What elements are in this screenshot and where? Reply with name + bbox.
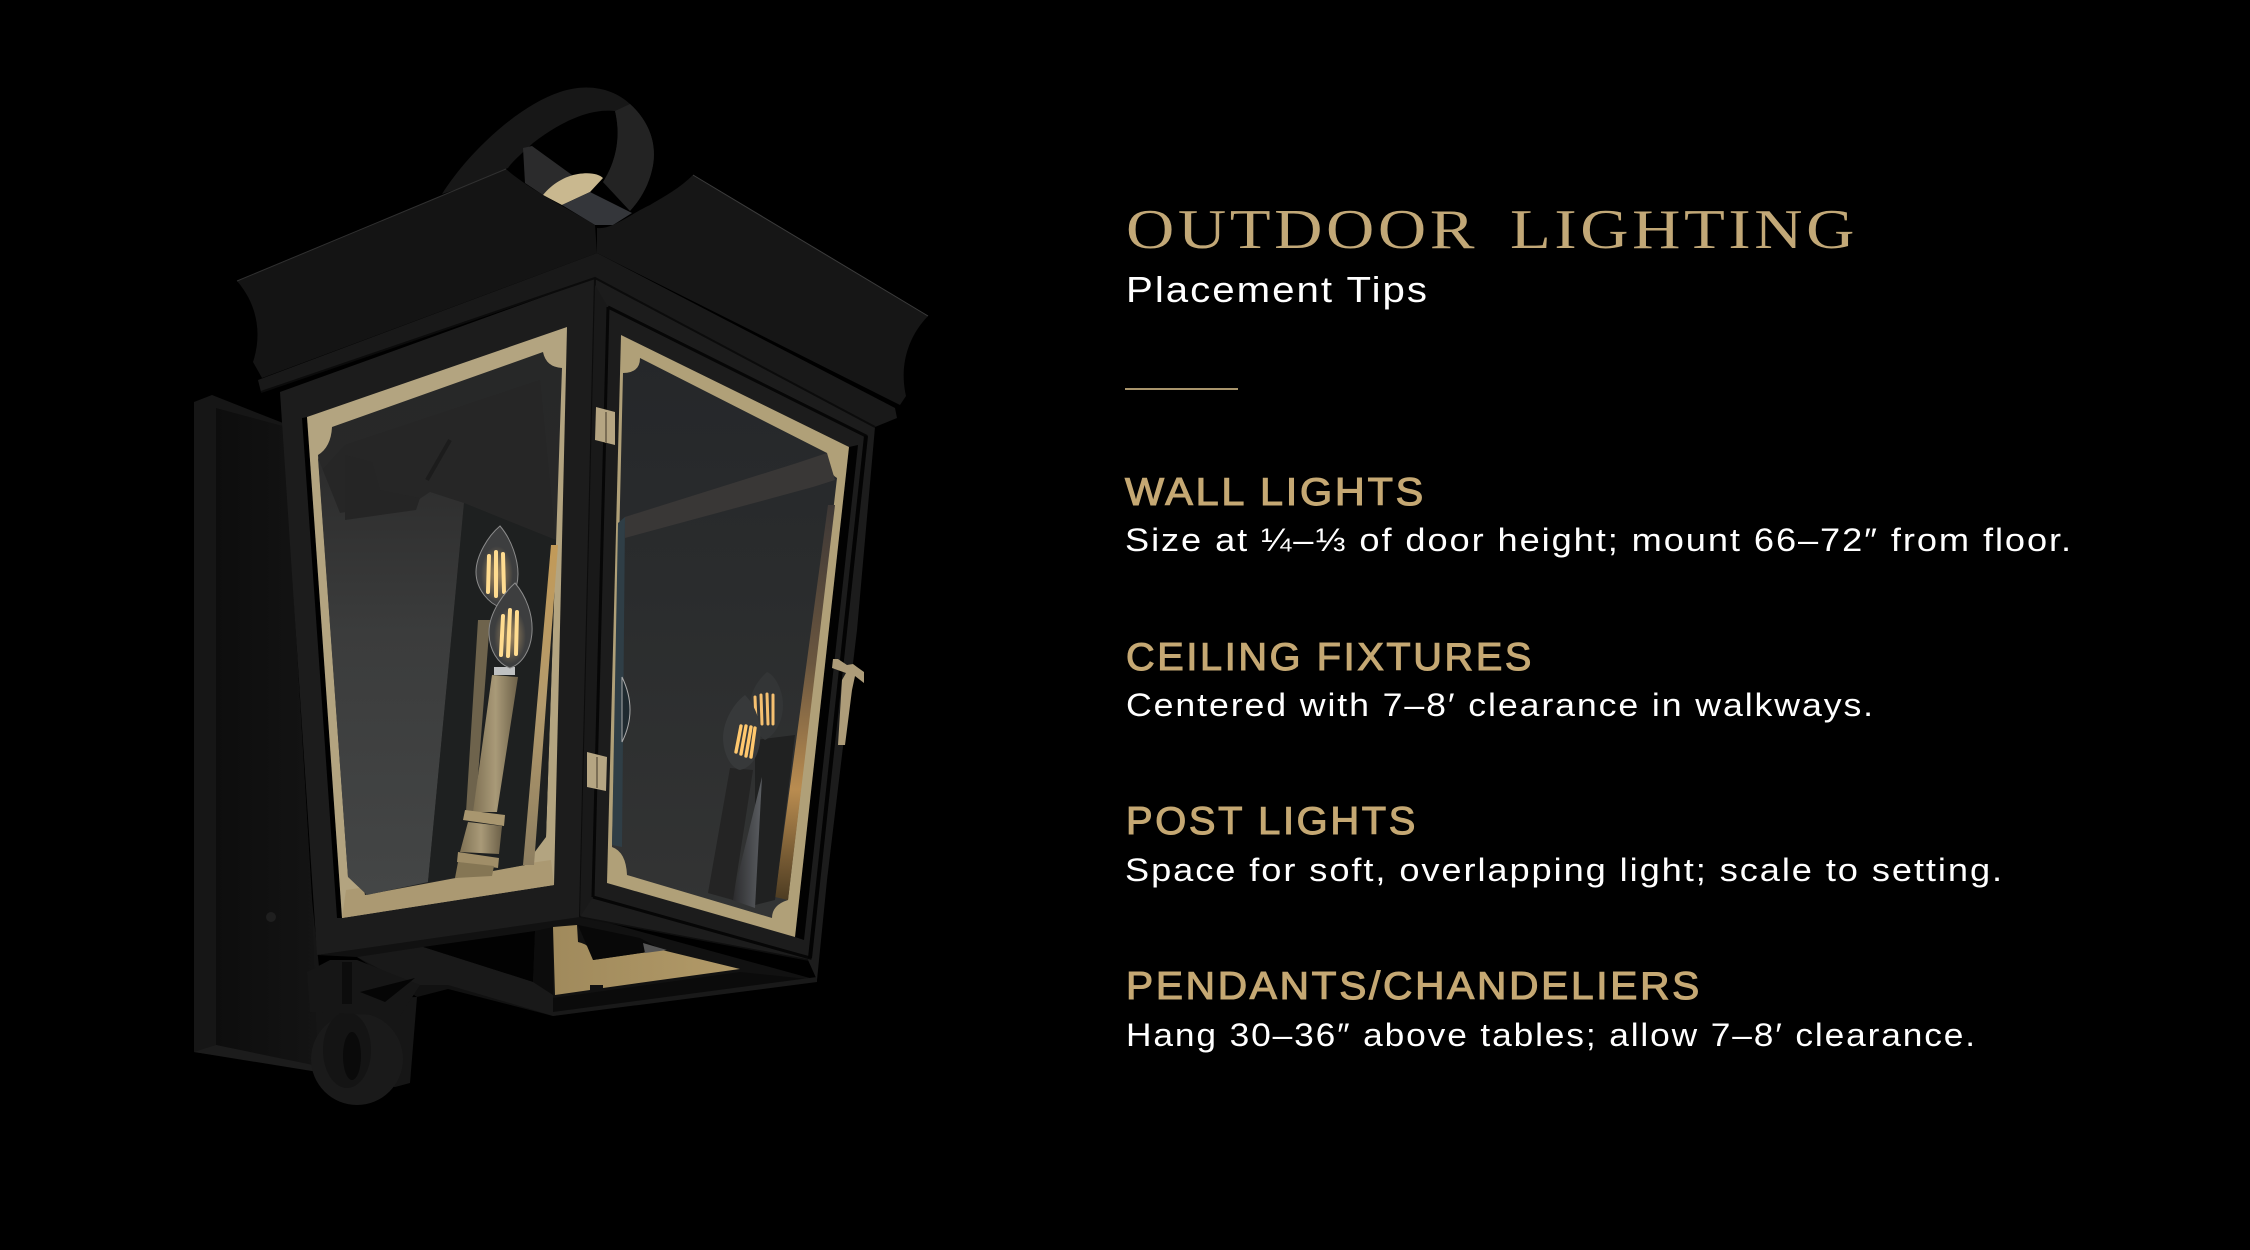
- reflected bulb arc: [622, 677, 630, 742]
- description: Centered with 7–8′ clearance in walkways.: [1126, 687, 1875, 723]
- underside plate and open bottom: [317, 915, 817, 1016]
- title word one: OUTDOOR: [1126, 199, 1478, 261]
- brass rods: [466, 620, 490, 815]
- ledge under roof: [258, 253, 897, 427]
- tip: wall lights: [1125, 471, 2073, 558]
- handle mount leaf: [523, 146, 572, 195]
- description: Space for soft, overlapping light; scale to setting.: [1125, 852, 2004, 888]
- reflected beam: [625, 453, 835, 538]
- tip: pendants and chandeliers: [1126, 965, 1977, 1053]
- brass hinges: [587, 407, 615, 791]
- brass knob: [543, 173, 603, 205]
- heading: PENDANTS/CHANDELIERS: [1126, 965, 1702, 1008]
- lower bulb: [489, 583, 532, 668]
- flared lantern roof: [237, 169, 928, 405]
- title word two: LIGHTING: [1510, 199, 1858, 261]
- heading: POST LIGHTS: [1126, 800, 1418, 843]
- upper bulb: [750, 672, 783, 740]
- support bar: [357, 947, 553, 1016]
- wall backplate: [194, 395, 330, 1072]
- hanging scroll handle: [442, 88, 654, 225]
- glass: [612, 358, 837, 918]
- lower scroll bracket: [307, 960, 420, 1105]
- brass latch: [832, 659, 864, 745]
- heading: CEILING FIXTURES: [1126, 636, 1534, 679]
- left candle and bulbs: [455, 526, 532, 878]
- mount cone: [562, 192, 632, 225]
- brass frame: [795, 445, 858, 940]
- heading: WALL LIGHTS: [1125, 471, 1426, 514]
- subtitle: Placement Tips: [1126, 269, 1429, 310]
- title: [1126, 199, 1858, 261]
- right glass panel: [607, 335, 858, 940]
- description: Hang 30–36″ above tables; allow 7–8′ clearance.: [1126, 1017, 1977, 1053]
- tip: ceiling fixtures: [1126, 636, 1875, 723]
- upper bulb: [476, 526, 518, 607]
- brass floor plate: [553, 925, 740, 995]
- tip: post lights: [1125, 800, 2004, 888]
- lower bulb: [723, 695, 760, 770]
- blue edge reflection: [612, 517, 625, 847]
- glass: [318, 352, 562, 895]
- brass frame: [302, 417, 342, 918]
- warm reflection strip: [775, 505, 835, 900]
- lantern illustration: [194, 88, 928, 1105]
- divider: [1125, 388, 1238, 390]
- lantern body frame: [280, 278, 875, 980]
- description: Size at ¼–⅓ of door height; mount 66–72″ from floor.: [1125, 522, 2073, 558]
- reflected interior: [322, 380, 556, 545]
- right candles and bulbs: [708, 672, 795, 908]
- left glass panel: [302, 327, 567, 918]
